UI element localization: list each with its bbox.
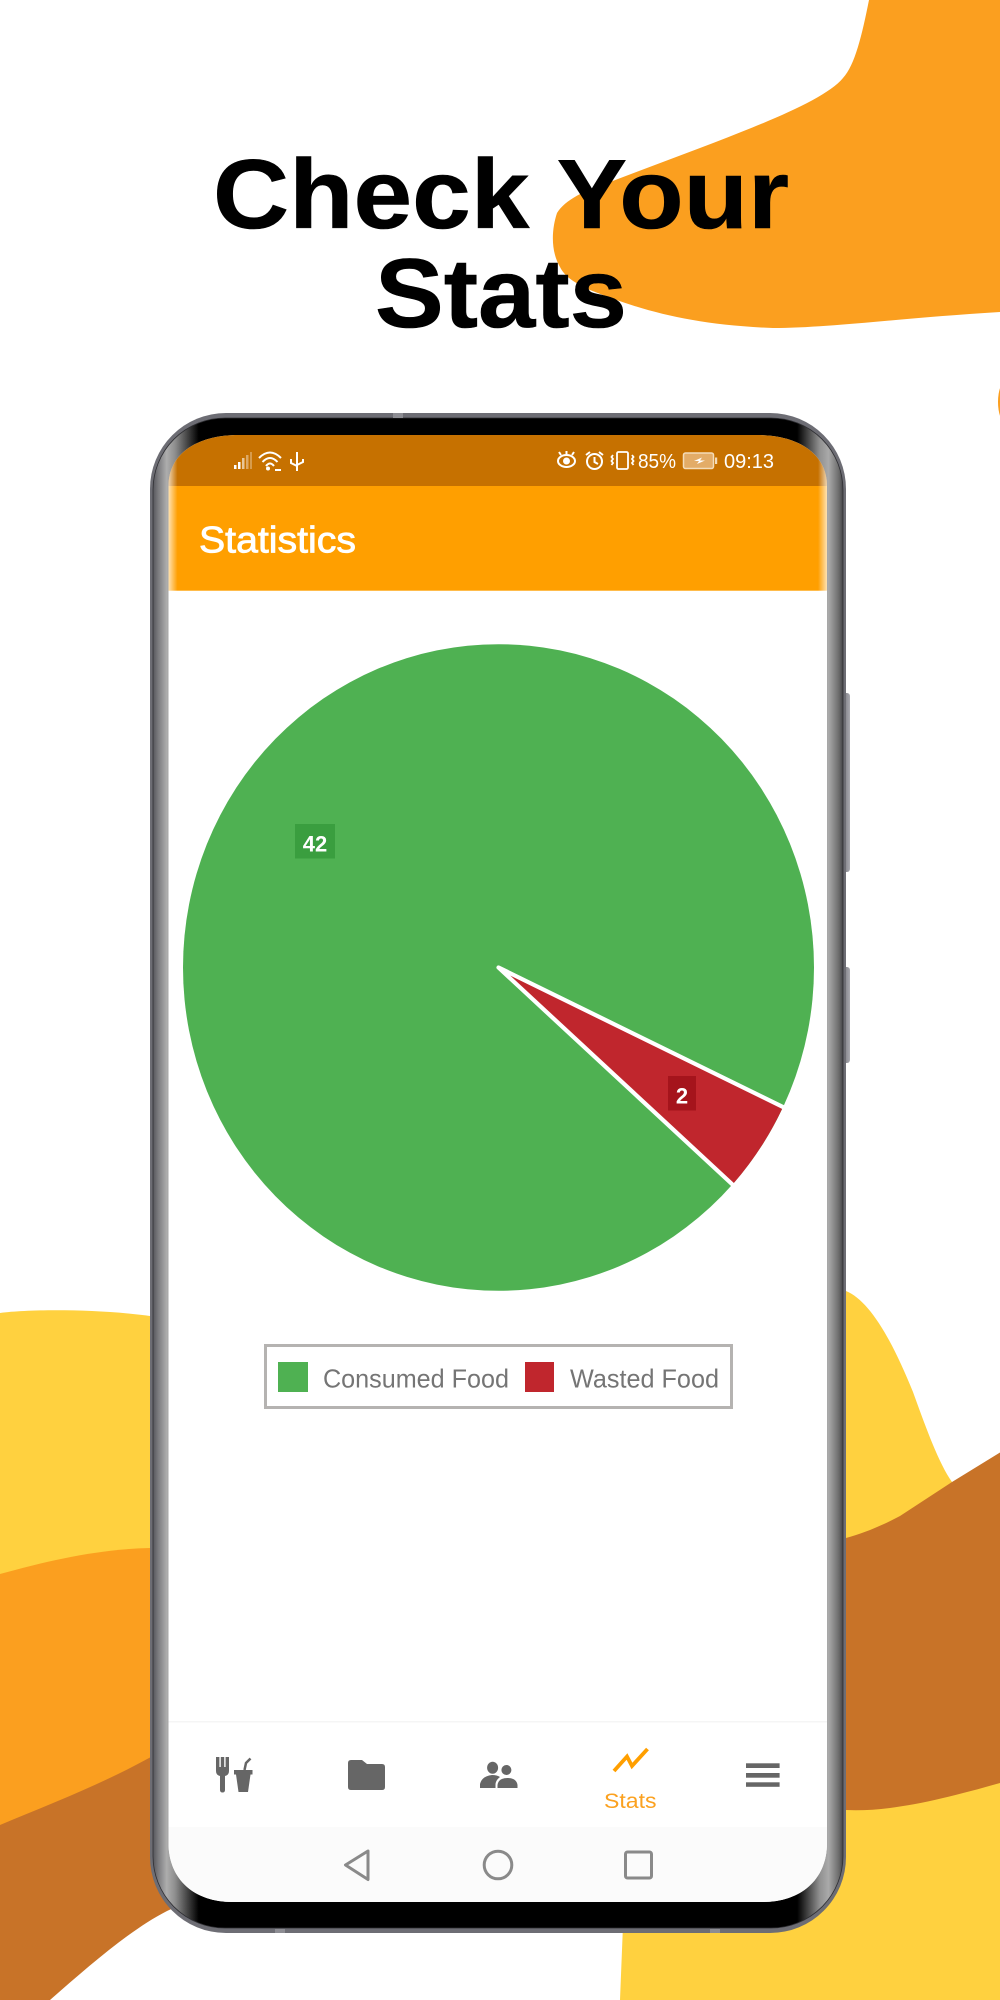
legend swatch consumed (278, 1362, 308, 1392)
data label 2 (668, 1076, 696, 1110)
icon: food and drink (216, 1757, 252, 1792)
legend (266, 1346, 732, 1408)
battery percent: 85% (638, 450, 676, 473)
decorative blob: right edge orange sliver (998, 381, 1000, 423)
legend swatch wasted (525, 1362, 554, 1392)
icon: home (484, 1851, 512, 1879)
edge highlight right (818, 460, 827, 591)
status bar (168, 435, 827, 486)
android navigation buttons (346, 1851, 652, 1880)
decorative blob: bottom left orange (0, 1548, 300, 1850)
bottom navigation (216, 1749, 780, 1813)
data label 42: 42 (303, 832, 327, 856)
phone screen (168, 435, 827, 1902)
decorative blob: top right orange (553, 0, 1000, 328)
icon: stats line (614, 1749, 648, 1771)
status icons right (558, 450, 774, 473)
slice separators (498, 968, 784, 1185)
icon: signal bars (234, 452, 252, 469)
icon: vibrate (612, 452, 634, 469)
wasted food slice (498, 968, 783, 1184)
icon: menu (746, 1763, 780, 1787)
app bar heading: Statistics (199, 520, 356, 561)
phone mockup (150, 413, 850, 1933)
pie chart (183, 644, 814, 1291)
icon: people (480, 1762, 518, 1788)
status icons left (234, 452, 303, 471)
decorative blob: bottom right brown (700, 1452, 1000, 1810)
icon: folder (348, 1760, 385, 1790)
edge highlight left (168, 460, 177, 591)
app bar (168, 486, 827, 591)
legend label consumed: Consumed Food (323, 1364, 509, 1394)
data label 42 (295, 824, 335, 858)
icon: recents (626, 1852, 652, 1878)
legend label wasted: Wasted Food (570, 1364, 719, 1394)
clock: 09:13 (724, 450, 774, 473)
icon: usb (291, 452, 303, 471)
icon: eye comfort (558, 451, 575, 467)
decorative blob: bottom left brown (0, 1720, 300, 2000)
data label 2: 2 (676, 1084, 688, 1108)
decorative blob: bottom right yellow (620, 1270, 1000, 2000)
nav label stats: Stats (604, 1789, 656, 1813)
decorative blob: bottom left yellow (0, 1310, 300, 1600)
phone frame (150, 413, 846, 1933)
title: Stats (375, 238, 627, 348)
gesture navigation background (168, 1846, 827, 1902)
icon: back (346, 1851, 368, 1880)
icon: wifi (259, 452, 281, 470)
side buttons (843, 693, 850, 1063)
consumed food slice (183, 644, 814, 1291)
title (213, 139, 789, 348)
icon: alarm (586, 452, 603, 469)
icon: battery (684, 453, 717, 468)
title: Check Your (213, 139, 789, 249)
